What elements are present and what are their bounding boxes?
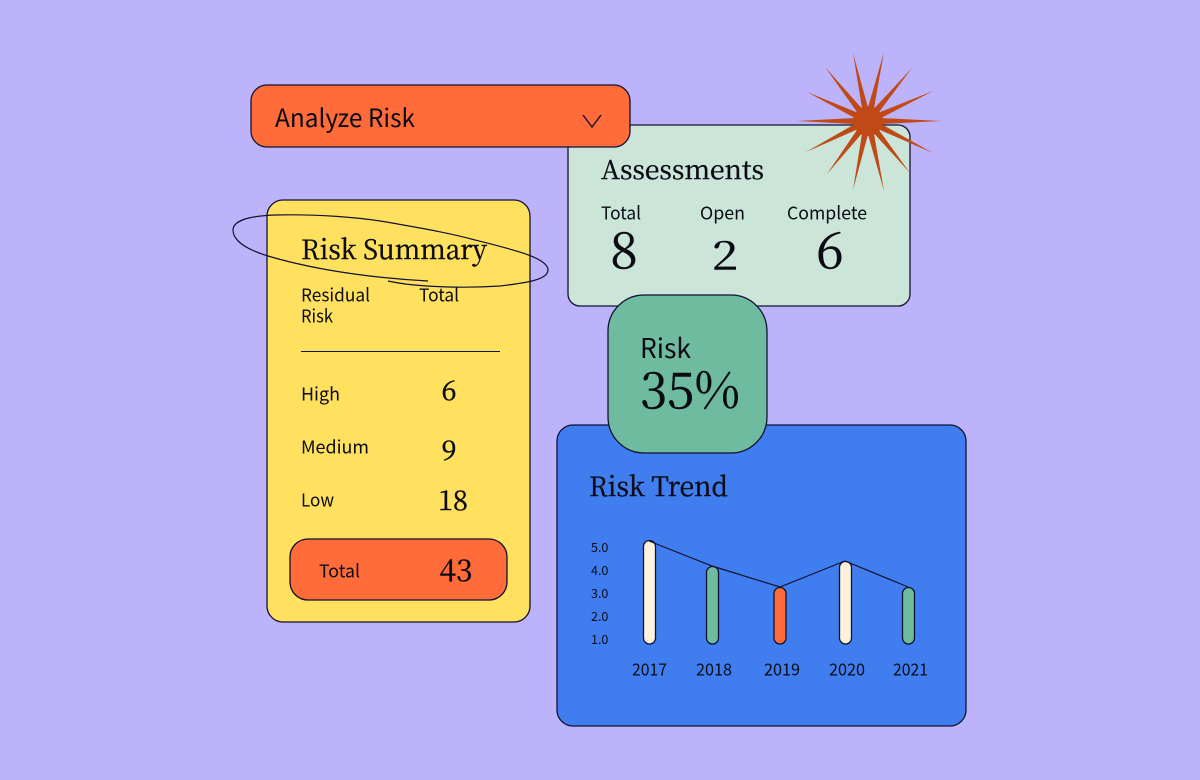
bar chart	[644, 540, 914, 644]
x axis labels	[632, 656, 928, 680]
callout: risk 35%: Risk	[640, 327, 691, 366]
row: high: High	[301, 380, 340, 406]
x axis labels: 2019	[764, 656, 800, 680]
stat: complete: Complete	[787, 200, 867, 226]
heading: risk trend: Risk Trend	[589, 465, 728, 504]
panel: assessments	[568, 125, 910, 306]
trend line	[649, 541, 908, 587]
column headers: Risk	[301, 302, 333, 328]
x axis labels: 2017	[632, 656, 667, 680]
icon: chevron	[583, 115, 601, 127]
row: low	[301, 479, 468, 518]
y axis labels: 4.0	[591, 560, 608, 579]
x axis labels: 2021	[893, 656, 928, 680]
row: medium: 9	[442, 429, 456, 468]
row: high: 6	[442, 369, 456, 408]
row: total	[290, 539, 507, 600]
panel: risk summary	[267, 200, 530, 622]
callout: risk 35%	[608, 295, 767, 453]
stat: total: 8	[610, 211, 638, 283]
row: medium	[301, 429, 456, 468]
scribble: ellipse around heading	[233, 215, 548, 287]
x axis labels: 2018	[696, 656, 732, 680]
callout: risk 35%: 35%	[640, 351, 740, 423]
column headers: Residual	[301, 282, 370, 308]
row: total: 43	[440, 546, 472, 590]
heading: assessments: Assessments	[601, 150, 764, 187]
stat: total: Total	[601, 200, 641, 226]
stat: complete	[787, 200, 867, 283]
row: medium: Medium	[301, 434, 369, 460]
dropdown: analyze risk	[251, 85, 630, 147]
y axis labels: 5.0	[591, 537, 608, 556]
x axis labels: 2020	[829, 656, 865, 680]
y axis labels: 1.0	[591, 629, 608, 648]
row: low: 18	[438, 479, 468, 518]
stat: complete: 6	[816, 211, 844, 283]
panel: risk trend	[557, 425, 966, 726]
row: total: Total	[319, 558, 360, 584]
column headers	[301, 282, 459, 328]
row: low: Low	[301, 486, 334, 512]
heading: risk summary: Risk Summary	[301, 228, 487, 267]
icon: starburst	[797, 52, 941, 191]
row: high	[301, 369, 456, 408]
dropdown: analyze risk: Analyze Risk	[275, 99, 415, 135]
y axis labels: 3.0	[591, 583, 608, 602]
stat: open: 2	[712, 224, 738, 282]
y axis labels: 2.0	[591, 606, 608, 625]
y axis labels	[591, 537, 608, 648]
stat: total	[601, 200, 641, 283]
column headers: Total	[419, 282, 459, 308]
stat: open: Open	[700, 200, 745, 226]
stat: open	[700, 200, 745, 282]
